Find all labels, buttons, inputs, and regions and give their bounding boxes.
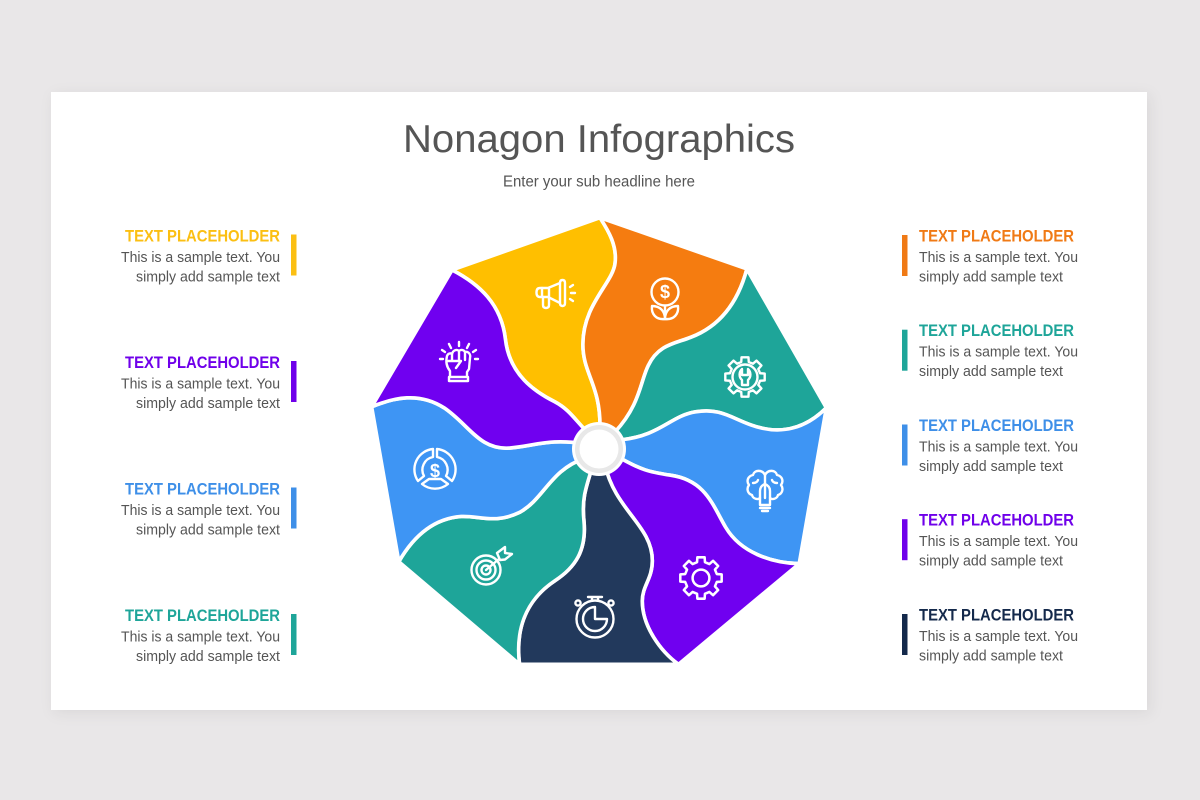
callout: right 2 <box>902 322 1078 380</box>
segment: navy <box>519 465 678 664</box>
callout: left 2: simply add sample text <box>136 396 280 412</box>
callout: right 5: simply add sample text <box>919 648 1063 664</box>
callout: right 2: TEXT PLACEHOLDER <box>919 322 1074 340</box>
segment: teal lower <box>399 458 592 664</box>
center hub <box>572 422 626 476</box>
callout: left 2: TEXT PLACEHOLDER <box>125 354 280 372</box>
subtitle: Enter your sub headline here <box>503 174 695 190</box>
callout: right 4: This is a sample text. You <box>919 534 1078 550</box>
callout: left 1 <box>121 228 296 286</box>
icon: money flower <box>652 278 678 319</box>
callout: left 4 <box>121 607 296 665</box>
callout: left 4: TEXT PLACEHOLDER <box>125 607 280 625</box>
icon: brain bulb <box>748 471 782 511</box>
segment: orange <box>583 218 747 432</box>
callout: right 3: simply add sample text <box>919 459 1063 475</box>
segment: yellow <box>452 218 615 435</box>
callout: left 3: This is a sample text. You <box>121 503 280 519</box>
callout: left 3 <box>121 480 296 538</box>
callout: right 3 <box>902 417 1078 475</box>
callout: left 3: simply add sample text <box>136 522 280 538</box>
callout: right 5: This is a sample text. You <box>919 629 1078 645</box>
callout: left 4: simply add sample text <box>136 649 280 665</box>
icon: money flower: $ <box>660 282 670 302</box>
callout: left 1: This is a sample text. You <box>121 250 280 266</box>
segment: purple lower <box>605 455 799 664</box>
icon: dollar ring <box>414 449 456 489</box>
callout: left 2 <box>121 354 296 412</box>
callout: right 2: This is a sample text. You <box>919 345 1078 361</box>
segment: purple upper <box>372 270 590 448</box>
segment: blue right <box>615 408 826 564</box>
icon: target <box>472 547 512 584</box>
callout: left 1: simply add sample text <box>136 270 280 286</box>
callout: right 2: simply add sample text <box>919 364 1063 380</box>
callout: right 1: TEXT PLACEHOLDER <box>919 228 1074 246</box>
callout: left 2: This is a sample text. You <box>121 376 280 392</box>
callout: right 3: TEXT PLACEHOLDER <box>919 417 1074 435</box>
icon: raised fist <box>440 342 478 381</box>
icon: dollar ring: $ <box>430 461 440 481</box>
icon: gear <box>680 557 722 599</box>
callout: right 5: TEXT PLACEHOLDER <box>919 606 1074 624</box>
icon: stopwatch <box>575 597 614 638</box>
icon: gear with wrench <box>725 357 765 397</box>
nonagon diagram <box>372 218 826 664</box>
callout: right 4: simply add sample text <box>919 554 1063 570</box>
callout: right 1: This is a sample text. You <box>919 250 1078 266</box>
icon: megaphone <box>536 280 575 308</box>
callout: right 4: TEXT PLACEHOLDER <box>919 512 1074 530</box>
callout: right 5 <box>902 606 1078 664</box>
callout: right 3: This is a sample text. You <box>919 440 1078 456</box>
callout: left 3: TEXT PLACEHOLDER <box>125 480 280 498</box>
callout: left 4: This is a sample text. You <box>121 630 280 646</box>
callout: right 1 <box>902 228 1078 286</box>
callout: right 1: simply add sample text <box>919 270 1063 286</box>
title: Nonagon Infographics <box>403 118 795 161</box>
slide card <box>51 92 1147 710</box>
callout: right 4 <box>902 512 1078 570</box>
segment: blue left <box>372 398 585 562</box>
segment: teal upper <box>615 269 826 440</box>
callout: left 1: TEXT PLACEHOLDER <box>125 228 280 246</box>
